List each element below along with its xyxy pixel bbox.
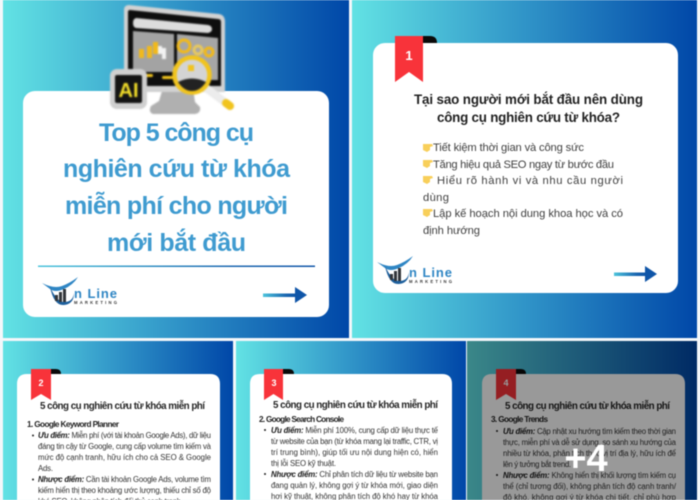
list text: Lập kế hoạch nội dung khoa học và có xyxy=(433,208,623,220)
pros and cons: nhiều từ khóa, phân tích theo vị trí địa lý, hữu ích để xyxy=(503,449,676,458)
question heading xyxy=(414,92,643,125)
monitor screen xyxy=(128,10,221,86)
cover title: Top 5 công cụ xyxy=(99,119,254,147)
list text xyxy=(423,142,623,237)
ribbon back xyxy=(420,36,437,43)
ribbon back xyxy=(281,369,294,374)
cover card xyxy=(23,91,329,317)
monitor stand xyxy=(150,88,200,114)
benefits list xyxy=(423,142,623,237)
logo: On Line Marketing: n Line xyxy=(74,286,117,301)
pros and cons: Nhược điểm: Cần tài khoản Google Ads, volume tìm xyxy=(38,475,211,484)
ribbon back xyxy=(48,369,61,374)
panel: why beginners xyxy=(352,0,697,338)
list text: Tăng hiệu quả SEO ngay từ bước đầu xyxy=(433,159,614,171)
slide 2 background xyxy=(3,341,233,500)
pros and cons: đang quản lý, không gợi ý từ khóa mới, giao diện xyxy=(271,481,438,490)
tool heading: 3. Google Trends xyxy=(491,415,548,424)
question heading: công cụ nghiên cứu từ khóa? xyxy=(437,110,620,125)
left chart panel xyxy=(133,31,174,72)
ribbon number 1 xyxy=(395,36,423,82)
ribbon number 2 xyxy=(31,369,51,400)
magnifier lens xyxy=(174,58,210,92)
pros and cons: trí trung bình), giúp tối ưu nội dung hiện có, hiển xyxy=(271,448,438,457)
slide 3 background xyxy=(236,341,466,500)
arrow xyxy=(614,266,657,282)
pros and cons xyxy=(264,426,439,500)
cover title xyxy=(63,119,291,257)
cover title: miễn phí cho người xyxy=(65,190,288,220)
icons: pointing hands xyxy=(423,144,433,217)
logo: On Line Marketing: MARKETING xyxy=(409,279,452,284)
list text: định hướng xyxy=(423,225,480,237)
list text: dùng xyxy=(423,192,449,204)
slide 1 background xyxy=(352,0,697,338)
logo: On Line Marketing xyxy=(377,256,452,284)
question heading: Tại sao người mới bắt đầu nên dùng xyxy=(414,92,643,107)
slide 3 heading: 5 công cụ nghiên cứu từ khóa miễn phí xyxy=(273,400,438,411)
dark overlay xyxy=(467,341,697,500)
panel: Google Keyword Planner xyxy=(3,341,233,500)
cover title: mới bắt đầu xyxy=(107,227,246,257)
ribbon back xyxy=(514,369,526,374)
slide 2 heading: 5 công cụ nghiên cứu từ khóa miễn phí xyxy=(40,401,205,412)
pros and cons xyxy=(32,431,212,500)
logo: On Line Marketing: n Line xyxy=(409,265,452,280)
slide 1 card xyxy=(373,43,678,293)
tool heading: 1. Google Keyword Planner xyxy=(27,420,120,429)
pros and cons: lên ý tưởng bắt trend. xyxy=(503,460,571,469)
slide 4 heading: 5 công cụ nghiên cứu từ khóa miễn phí xyxy=(505,401,670,412)
pros and cons: từ website của bạn (từ khóa mang lại traffic, CTR, vị xyxy=(271,437,438,446)
tool heading: 2. Google Search Console xyxy=(259,415,344,424)
list text: Tiết kiệm thời gian và công sức xyxy=(433,142,584,154)
more photos counter: +4 xyxy=(564,438,608,480)
panel: Google Trends with more overlay xyxy=(467,341,697,500)
pros and cons: thể (chỉ tương đối), không phân tích độ cạnh tranh/ xyxy=(503,482,677,491)
pros and cons: Ưu điểm: Miễn phí (với tài khoản Google Ads), dữ liệu xyxy=(38,431,211,440)
right chart panel xyxy=(177,34,218,80)
pros and cons: Ads. xyxy=(38,464,53,473)
divider xyxy=(38,266,315,267)
slide 3 card xyxy=(250,374,452,500)
pros and cons: Ưu điểm: Cập nhật xu hướng tìm kiếm theo thời gian xyxy=(503,427,676,436)
arrow xyxy=(263,287,307,303)
slide 4 background xyxy=(467,341,697,500)
ribbon number 2: 2 xyxy=(38,378,44,388)
list text: Hiểu rõ hành vi và nhu cầu người xyxy=(437,175,623,187)
ribbon number 4 xyxy=(496,369,516,400)
ribbon number 3 xyxy=(264,369,283,400)
pros and cons: thị lỗi SEO kỹ thuật. xyxy=(271,459,336,468)
address bar xyxy=(133,18,212,33)
donut charts xyxy=(178,40,213,56)
bar chart xyxy=(139,42,166,59)
logo: On Line Marketing xyxy=(42,277,117,305)
magnifier handle xyxy=(206,88,230,106)
pros and cons: thực, miễn phí và dễ sử dụng, so sánh xu hướng của xyxy=(503,438,677,447)
pros and cons: mức độ cạnh tranh, hữu ích cho cả SEO & Google xyxy=(38,453,211,462)
ribbon number 3: 3 xyxy=(271,378,277,388)
cover background xyxy=(3,0,349,338)
pros and cons: đáng tin cậy từ Google, cung cấp volume tìm kiếm và xyxy=(38,442,212,451)
logo: On Line Marketing: MARKETING xyxy=(74,300,117,305)
pros and cons: kiếm hiển thị theo khoảng ước lượng, thiếu chỉ số độ xyxy=(38,486,212,495)
slide 2 card xyxy=(17,374,220,500)
illustration: monitor with magnifier and AI chip xyxy=(110,5,230,114)
slide 4 card xyxy=(482,374,685,500)
ribbon number 4: 4 xyxy=(503,378,509,388)
yellow dashes xyxy=(145,74,175,79)
pros and cons: Nhược điểm: Không hiển thị khối lượng tìm kiếm cụ xyxy=(503,471,676,480)
ribbon number 1: 1 xyxy=(405,48,413,63)
cover title: nghiên cứu từ khóa xyxy=(63,155,291,183)
panel: cover slide xyxy=(3,0,349,338)
AI chip: AI xyxy=(118,80,138,102)
monitor body xyxy=(124,5,225,92)
pros and cons: Ưu điểm: Miễn phí 100%, cung cấp dữ liệu thực tế xyxy=(271,426,439,435)
pros and cons xyxy=(496,427,677,500)
pros and cons: Nhược điểm: Chỉ phân tích dữ liệu từ website bạn xyxy=(271,470,438,479)
panel: Google Search Console xyxy=(236,341,466,500)
